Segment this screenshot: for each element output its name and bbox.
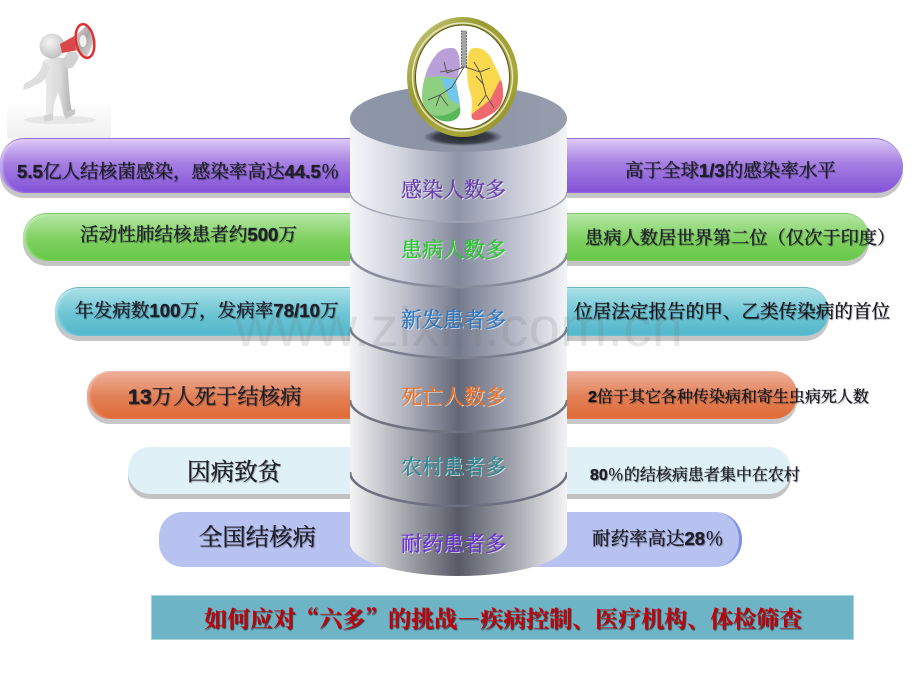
icon: 3D figure with megaphone [7, 22, 111, 138]
text: patients left: 活动性肺结核患者约500万 [80, 224, 297, 245]
text: patients right: 患病人数居世界第二位（仅次于印度） [585, 227, 895, 248]
text: deaths right: 2倍于其它各种传染病和寄生虫病死人数 [588, 389, 869, 406]
callout: bottom banner [151, 595, 854, 640]
label: patient count: 患病人数多 [401, 239, 506, 262]
label: drug resistant: 耐药患者多 [401, 533, 506, 556]
label: new cases: 新发患者多 [401, 309, 506, 332]
label: infected count: 感染人数多 [401, 179, 506, 202]
bar: drug resistance row [159, 512, 742, 567]
chart: six-layer cylinder [350, 88, 567, 576]
text: infection left: 5.5亿人结核菌感染，感染率高达44.5％ [17, 158, 339, 184]
watermark: www.zixin.com.cn [235, 295, 683, 358]
text: deaths left: 13万人死于结核病 [128, 385, 302, 409]
bar: deaths row [87, 371, 797, 419]
label: rural patients: 农村患者多 [401, 456, 506, 479]
label: deaths: 死亡人数多 [401, 386, 506, 409]
text: drug resistance left: 全国结核病 [199, 524, 316, 550]
text: rural right: 80％的结核病患者集中在农村 [590, 462, 800, 485]
text: infection right: 高于全球1/3的感染率水平 [625, 160, 836, 181]
bar: rural row [128, 447, 791, 494]
bar: new cases row [55, 287, 829, 336]
text: new cases right: 位居法定报告的甲、乙类传染病的首位 [574, 301, 890, 322]
text: new cases left: 年发病数100万，发病率78/10万 [75, 300, 339, 321]
text: drug resistance right: 耐药率高达28％ [592, 525, 724, 551]
text: banner heading: 如何应对“六多”的挑战—疾病控制、医疗机构、体检筛查 [204, 601, 802, 634]
text: rural left: 因病致贫 [187, 460, 281, 486]
bar: infection row [0, 138, 903, 193]
icon: lungs badge [407, 17, 518, 146]
bar: patients row [23, 213, 869, 261]
